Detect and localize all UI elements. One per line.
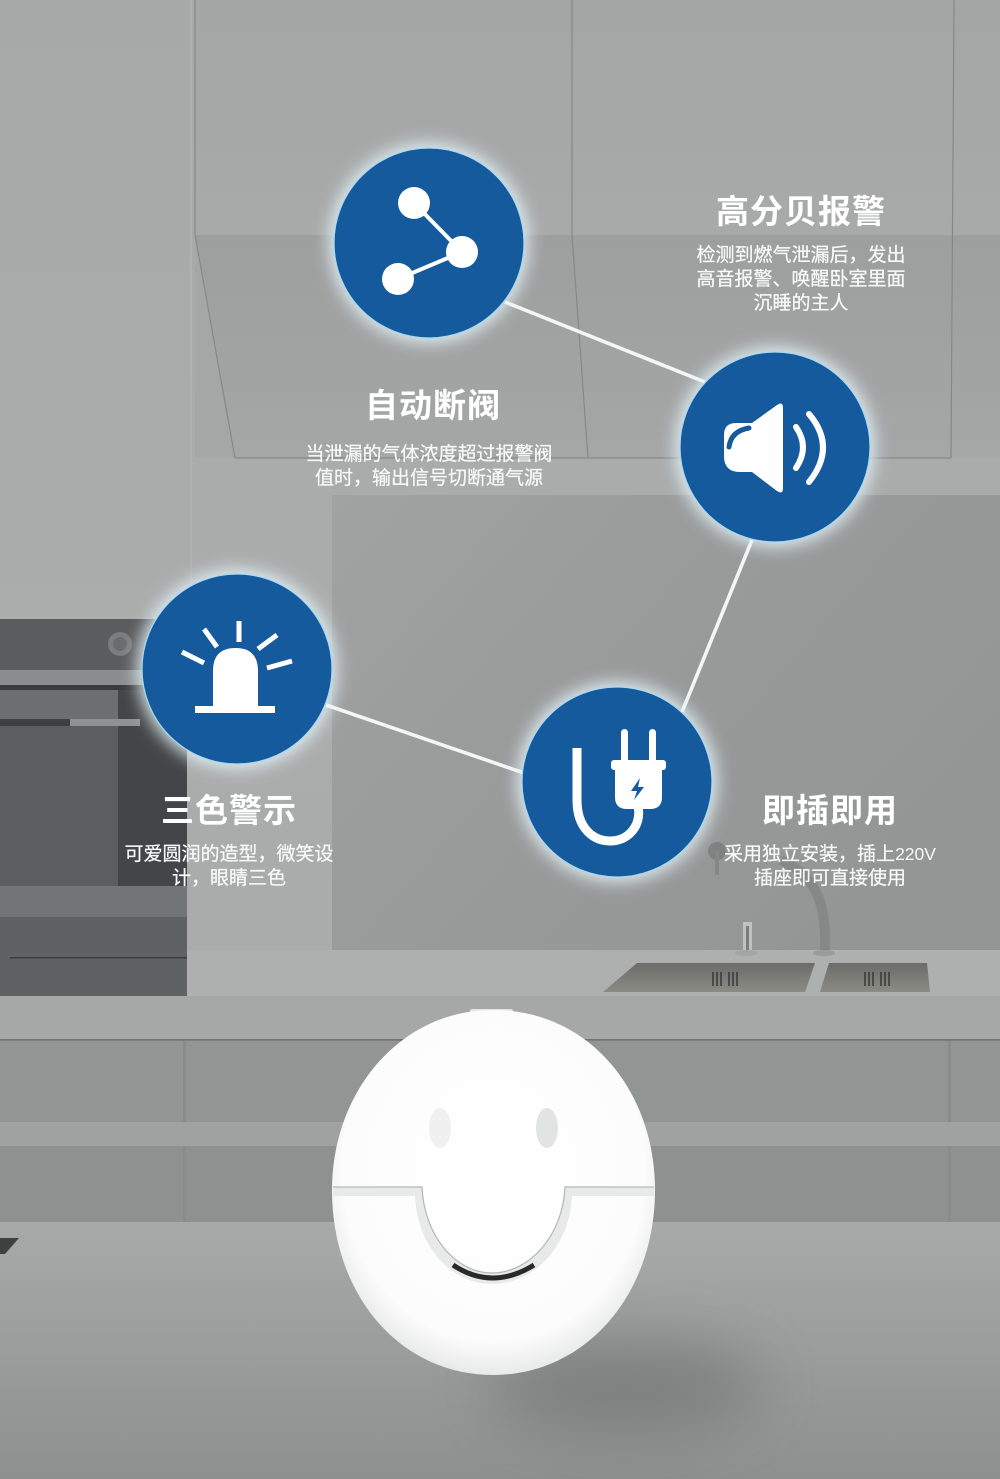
text: plug and play	[724, 844, 936, 889]
icon: warning beacon	[142, 574, 332, 764]
circle glows	[137, 143, 875, 882]
upper cabinets	[190, 0, 1000, 620]
text: loud alarm	[696, 244, 906, 314]
text: plug and play: 采用独立安装，插上220V	[724, 844, 936, 865]
heading: plug and play: 即插即用	[762, 792, 898, 829]
sink and faucet	[603, 842, 930, 992]
text: three-colour warning: 计，眼睛三色	[172, 868, 286, 889]
smiley gas alarm device	[332, 1009, 655, 1375]
text: automatic shutoff	[305, 444, 552, 489]
heading: automatic shutoff: 自动断阀	[365, 387, 501, 424]
icon: speaker / loud alarm	[680, 352, 870, 542]
countertop edge	[0, 996, 1000, 1039]
text: plug and play: 插座即可直接使用	[754, 868, 906, 889]
text: loud alarm: 检测到燃气泄漏后，发出	[696, 245, 906, 266]
oven	[0, 619, 187, 996]
text: three-colour warning: 可爱圆润的造型，微笑设	[124, 844, 334, 865]
text: loud alarm: 高音报警、唤醒卧室里面	[696, 269, 906, 290]
backsplash	[332, 495, 1000, 950]
heading: loud alarm: 高分贝报警	[716, 193, 886, 230]
text: automatic shutoff: 值时，输出信号切断通气源	[315, 468, 543, 489]
text: loud alarm: 沉睡的主人	[753, 293, 848, 314]
text: three-colour warning	[124, 844, 334, 889]
counter surface	[187, 950, 1000, 996]
text: automatic shutoff: 当泄漏的气体浓度超过报警阀	[305, 444, 552, 465]
table	[0, 1222, 1000, 1479]
product shadow	[485, 1337, 765, 1433]
heading: three-colour warning: 三色警示	[161, 792, 297, 829]
connector lines	[326, 302, 752, 773]
lower cabinets	[0, 1039, 1000, 1223]
icon: plug	[522, 687, 712, 877]
icon: share / automatic shutoff	[334, 148, 524, 338]
